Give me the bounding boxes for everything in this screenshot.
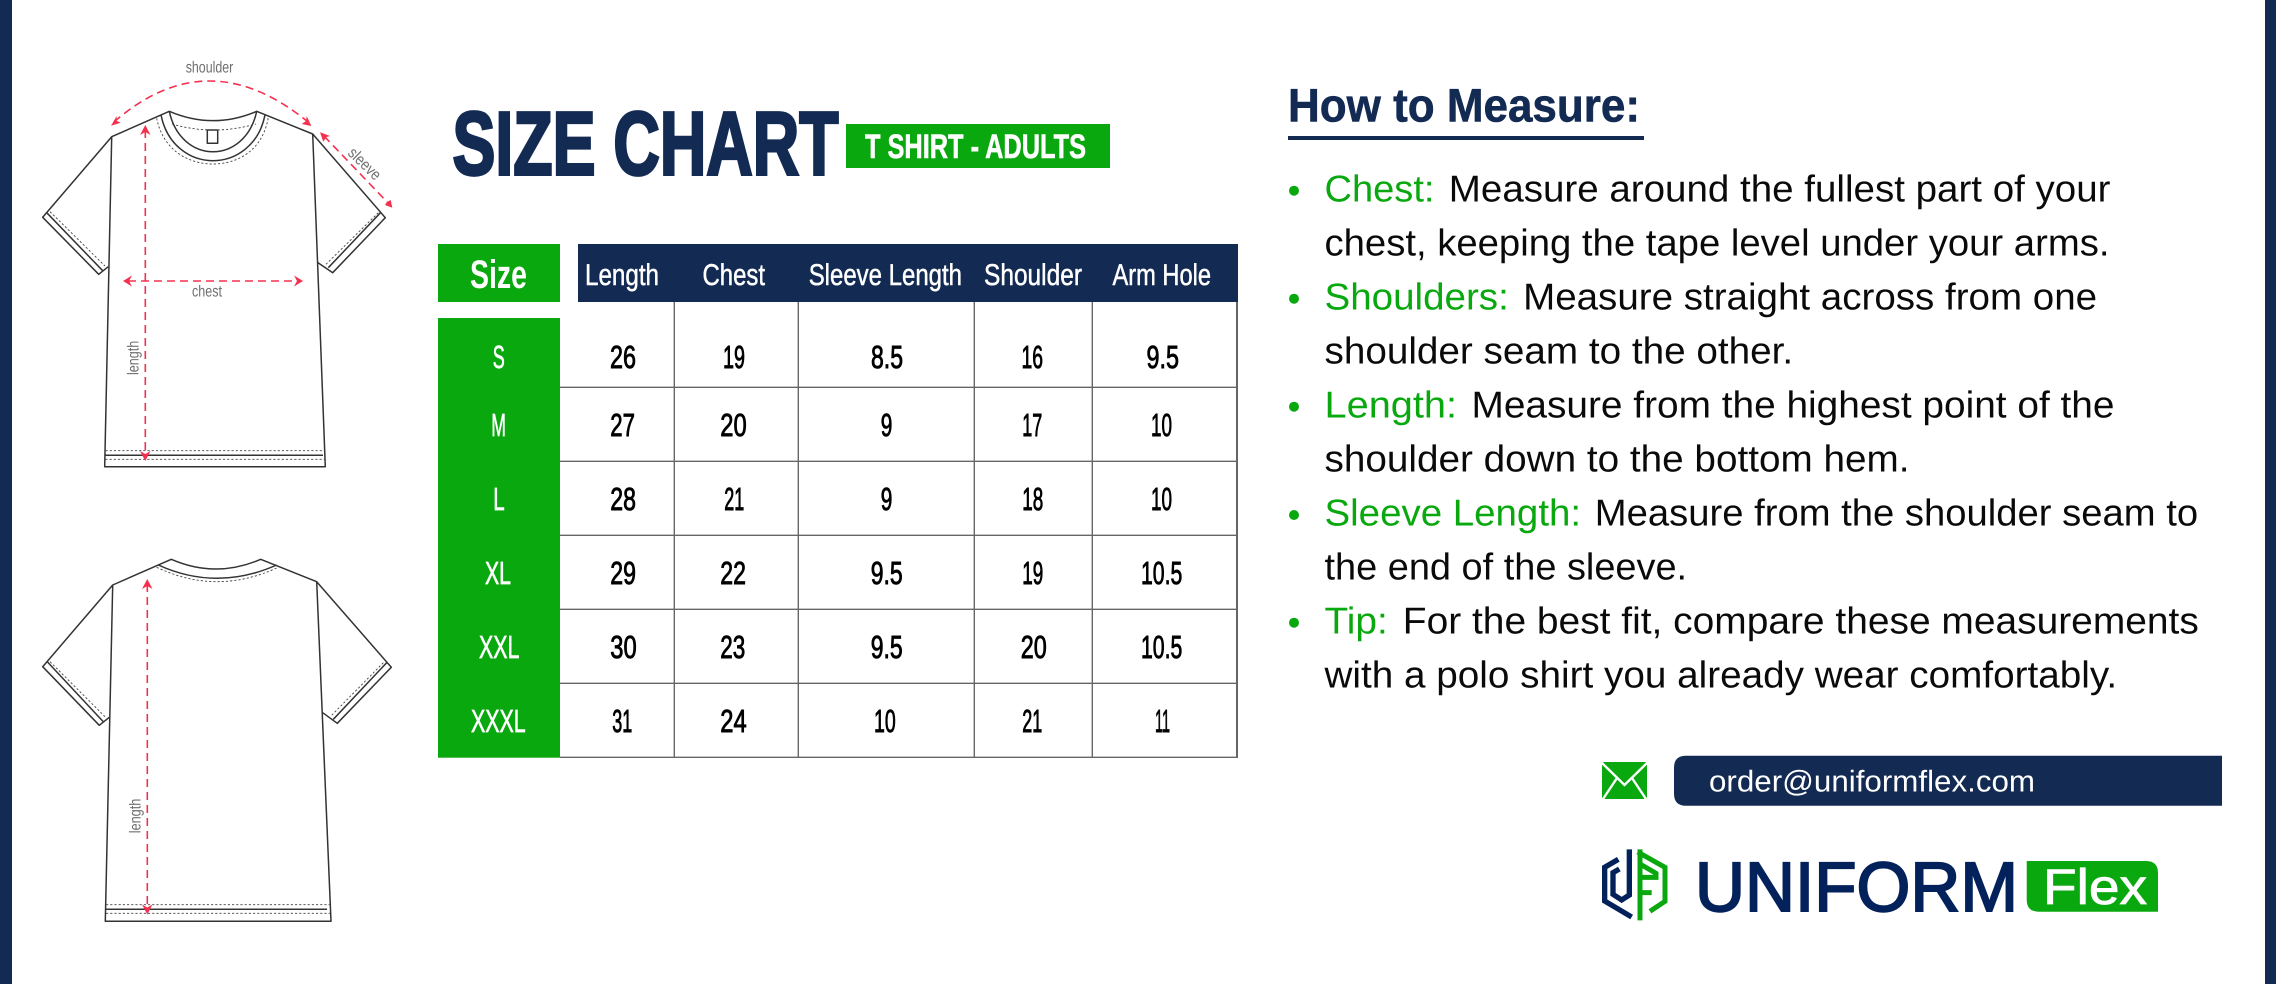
row XL: 9.5 <box>871 555 903 591</box>
row L: 9 <box>881 481 892 517</box>
row S: 9.5 <box>1146 339 1179 375</box>
item: length: Measure from the highest point of the <box>1471 384 2114 426</box>
measurement column headers: Sleeve Length <box>809 259 962 292</box>
row L <box>610 481 1172 517</box>
shoulder label: shoulder <box>186 59 234 76</box>
item: sleeve length: Measure from the shoulder seam to <box>1595 492 2198 534</box>
item: length: shoulder down to the bottom hem. <box>1324 438 1909 480</box>
item: shoulders: shoulder seam to the other. <box>1324 329 1793 371</box>
row L: 28 <box>610 481 636 517</box>
item: shoulders: Shoulders: <box>1324 276 1509 318</box>
email pill <box>1674 756 2222 806</box>
measurement column headers: Chest <box>702 259 766 292</box>
row S: 8.5 <box>871 339 903 375</box>
row XXL: 20 <box>1021 629 1047 665</box>
item: length <box>1289 384 2114 480</box>
icon: envelope <box>1602 762 1647 799</box>
item: sleeve length: Sleeve Length: <box>1324 492 1581 534</box>
measurement column headers: Shoulder <box>984 259 1082 292</box>
item: tip: Tip: <box>1324 599 1388 641</box>
size column header <box>438 244 560 302</box>
measurement column headers <box>578 244 1238 302</box>
length label: length <box>125 341 142 375</box>
email pill: order@uniformflex.com <box>1709 766 2035 799</box>
how to measure heading: How to Measure: <box>1288 79 1640 132</box>
item: tip: with a polo shirt you already wear comfortably. <box>1323 653 2117 695</box>
row S: 16 <box>1022 339 1043 375</box>
size labels column: XL <box>485 555 511 591</box>
row M: 10 <box>1151 407 1172 443</box>
shoulder arrow <box>111 81 311 126</box>
size column header: Size <box>470 253 527 297</box>
size labels column: XXL <box>479 629 519 665</box>
chest label: chest <box>192 284 222 301</box>
item: sleeve length <box>1289 492 2198 587</box>
back t-shirt diagram <box>43 559 391 921</box>
back length label: length <box>128 799 145 833</box>
logo icon <box>1605 849 1665 920</box>
row XL: 10.5 <box>1141 555 1182 591</box>
row XL: 19 <box>1022 555 1043 591</box>
sleeve arrow <box>320 132 392 208</box>
row M <box>610 407 1172 443</box>
logo wordmark: UNIFORM <box>1695 848 2018 926</box>
row XXL: 10.5 <box>1141 629 1182 665</box>
row XXL: 9.5 <box>871 629 903 665</box>
row S: 26 <box>610 339 636 375</box>
subtitle badge: T SHIRT - ADULTS <box>865 128 1086 166</box>
measurement column headers: Length <box>585 259 659 292</box>
item: chest: chest, keeping the tape level under your arms. <box>1324 222 2109 264</box>
row S <box>610 339 1179 375</box>
right navy side bar <box>2265 0 2276 984</box>
row S: 19 <box>723 339 745 375</box>
row L: 10 <box>1151 481 1172 517</box>
size labels column: S <box>493 339 505 375</box>
size labels column: M <box>491 407 506 443</box>
measurement column headers: Arm Hole <box>1112 259 1211 292</box>
row XXXL: 24 <box>720 703 747 739</box>
logo: Uniform Flex <box>1605 848 2158 926</box>
row XL: 29 <box>610 555 636 591</box>
front shirt outline <box>43 111 385 467</box>
size labels column <box>438 318 560 758</box>
size table: 11 <box>1155 703 1170 739</box>
how to measure list <box>1289 168 2199 695</box>
sleeve label: sleeve <box>344 145 384 184</box>
front t-shirt diagram <box>43 59 392 467</box>
row M: 20 <box>720 407 747 443</box>
table grid lines <box>560 302 1238 758</box>
row XL: 22 <box>720 555 746 591</box>
row XXXL: 10 <box>874 703 896 739</box>
length arrow <box>140 125 150 461</box>
row M: 17 <box>1022 407 1042 443</box>
row XXL: 30 <box>610 629 637 665</box>
item: chest <box>1289 168 2110 264</box>
chest arrow <box>123 276 303 286</box>
row XL <box>610 555 1182 591</box>
row L: 21 <box>724 481 744 517</box>
back shirt outline <box>43 559 391 921</box>
size labels column: L <box>493 481 505 517</box>
row XXXL <box>612 703 1170 739</box>
item: chest: Chest: <box>1324 168 1434 210</box>
logo flex badge: Flex <box>2043 859 2147 915</box>
row M: 9 <box>881 407 892 443</box>
item: tip <box>1289 599 2199 695</box>
item: tip: For the best fit, compare these measurements <box>1403 599 2199 641</box>
row XXXL: 21 <box>1022 703 1042 739</box>
row XXL <box>610 629 1182 665</box>
item: shoulders: Measure straight across from one <box>1523 276 2097 318</box>
item: shoulders <box>1289 276 2097 371</box>
back length arrow <box>142 579 152 914</box>
row M: 27 <box>610 407 635 443</box>
left navy side bar <box>0 0 12 984</box>
row XXL: 23 <box>720 629 745 665</box>
size labels column: XXXL <box>471 703 526 739</box>
item: length: Length: <box>1324 384 1457 426</box>
row L: 18 <box>1022 481 1043 517</box>
item: sleeve length: the end of the sleeve. <box>1324 545 1687 587</box>
title: SIZE CHART <box>452 94 839 194</box>
subtitle badge <box>846 124 1110 168</box>
size table <box>438 244 1238 758</box>
row XXXL: 31 <box>612 703 632 739</box>
item: chest: Measure around the fullest part of your <box>1449 168 2110 210</box>
